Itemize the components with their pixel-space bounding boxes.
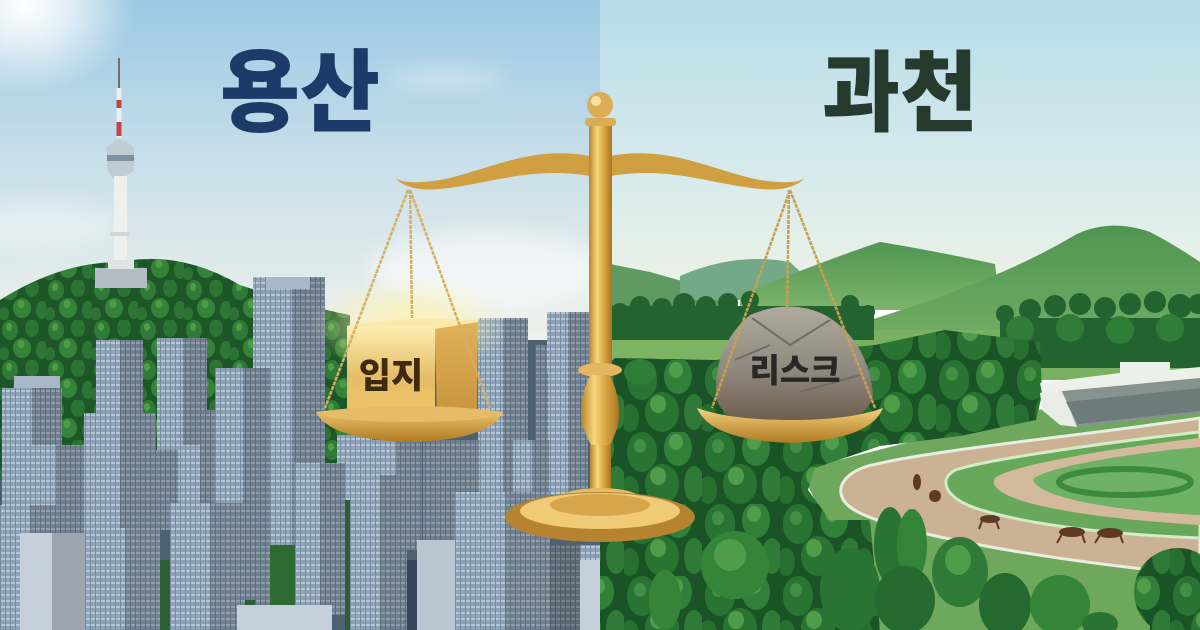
panel: racecourse field — [800, 395, 1200, 630]
glow behind gold block — [310, 275, 510, 375]
panel: right landscape hills — [600, 226, 1200, 395]
panel: skyscrapers, Yongsan — [0, 277, 600, 630]
left pan with gold block — [316, 318, 503, 442]
grandstand — [1040, 362, 1200, 427]
back row — [2, 277, 590, 550]
middle row — [28, 368, 407, 630]
scale base — [558, 488, 642, 512]
panel: building backdrop, left — [0, 340, 600, 630]
panel: right sky, Gwacheon — [600, 0, 1200, 300]
label: risk: 리스크 — [749, 352, 841, 389]
foreground trees, right — [600, 507, 1200, 630]
forest, right middle — [600, 330, 1042, 630]
heading: Yongsan: 용산 — [220, 44, 380, 144]
distant tree lines — [611, 291, 1200, 368]
panel: left sky, Yongsan — [0, 0, 610, 345]
scale beam — [394, 153, 590, 189]
scale post — [589, 120, 612, 370]
icon: N Seoul Tower — [95, 58, 147, 288]
balance scale — [394, 92, 806, 542]
chains, left pan — [325, 190, 490, 408]
racecourse track — [841, 418, 1200, 572]
chains, right pan — [712, 190, 875, 408]
horses on the track — [913, 474, 1123, 543]
front row — [0, 492, 600, 630]
heading: Gwacheon: 과천 — [822, 44, 978, 143]
forested hill, left — [0, 259, 350, 480]
right pan with rock — [697, 306, 883, 443]
label: location: 입지 — [359, 357, 423, 396]
